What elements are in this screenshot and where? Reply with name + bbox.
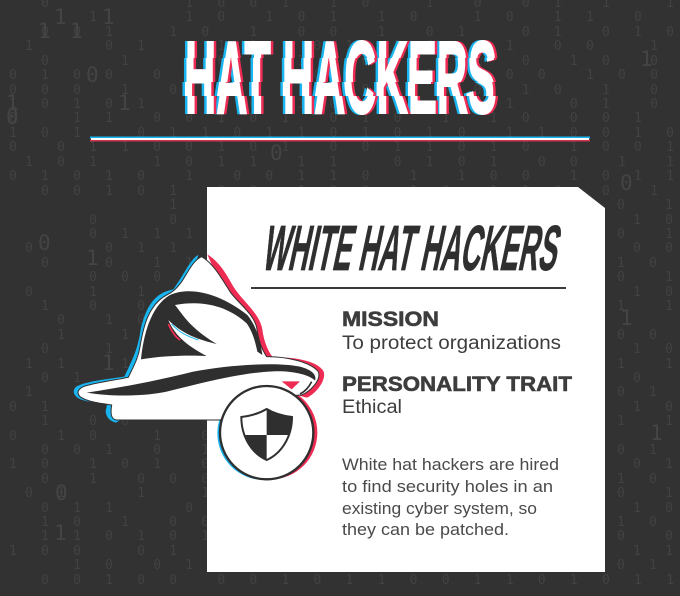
text: 1 0 1 0 1 0 1 — [9, 457, 249, 472]
text: 0 — [620, 171, 633, 195]
personality trait text: PERSONALITY TRAIT — [342, 373, 572, 396]
text: 0 — [55, 481, 68, 505]
text: 1 1 — [617, 414, 680, 429]
text: 1 0 0 1 0 — [9, 299, 217, 314]
text: 1 0 1 0 0 1 — [9, 515, 249, 530]
text: 1 — [650, 421, 663, 445]
text: 1 0 0 1 — [9, 558, 201, 573]
text: 0 1 — [617, 558, 665, 573]
text: 0 1 — [617, 443, 665, 458]
text: 1 0 1 0 1 1 1 0 1 0 0 1 1 0 1 0 1 0 1 — [9, 97, 680, 112]
text: 0 1 1 — [9, 285, 153, 300]
text: 0 0 — [617, 241, 680, 256]
text: 0 1 — [9, 400, 57, 415]
text: 0 — [86, 63, 99, 87]
description text: White hat hackers are hired — [342, 455, 559, 474]
text: 1 0 0 — [9, 414, 137, 429]
text: 0 1 0 — [9, 342, 185, 357]
text: 0 1 0 0 0 0 — [9, 472, 249, 487]
text: 0 1 — [617, 198, 680, 213]
shield badge — [220, 386, 313, 479]
text: 0 1 1 1 1 — [9, 486, 249, 501]
icon: white hat with shield badge — [74, 254, 324, 480]
text: 1 1 — [617, 299, 680, 314]
text: 1 0 — [617, 400, 680, 415]
text: 0 1 — [617, 385, 665, 400]
text: 0 0 — [617, 529, 680, 544]
description text: they can be patched. — [342, 520, 509, 539]
mission text — [342, 308, 561, 354]
text: 0 0 1 1 0 1 0 0 1 0 1 0 1 0 1 0 — [9, 25, 680, 40]
text: 0 0 1 1 1 1 — [9, 241, 330, 256]
text: 0 0 1 1 — [9, 256, 201, 271]
text: 1 — [70, 19, 83, 43]
text: 0 — [617, 371, 649, 386]
text: 1 0 — [617, 472, 665, 487]
text: 0 1 1 0 0 1 0 0 1 1 0 1 0 0 1 — [9, 54, 680, 69]
hat brim band — [87, 364, 315, 396]
text: 1 — [102, 5, 115, 29]
text: 0 0 1 0 1 0 — [9, 443, 249, 458]
text: 0 1 1 0 0 1 — [9, 501, 265, 516]
description text: to find security holes in an — [342, 477, 553, 496]
mission text: MISSION — [342, 308, 439, 331]
text: 0 1 0 1 0 — [9, 313, 217, 328]
text: 1 — [102, 351, 115, 375]
text: 0 1 — [617, 457, 680, 472]
text: 1 — [118, 91, 131, 115]
text: 0 1 0 1 0 — [9, 429, 217, 444]
description text: existing cyber system, so — [342, 499, 537, 518]
text: 1 — [54, 5, 67, 29]
text: 0 1 — [9, 371, 89, 386]
text: 1 1 — [617, 544, 680, 559]
text: 1 1 — [617, 357, 680, 372]
text: 0 1 — [617, 486, 680, 501]
text: 1 — [640, 47, 653, 71]
hat crown band and feather — [141, 291, 262, 359]
text: 1 1 — [9, 328, 137, 343]
text: 0 0 1 0 — [9, 213, 297, 228]
text: 1 1 1 — [9, 357, 137, 372]
text: 1 0 0 0 1 1 — [9, 544, 233, 559]
text: 1 0 — [617, 256, 665, 271]
text: 1 0 — [617, 515, 665, 530]
text: 0 1 0 0 0 0 1 0 0 1 0 1 1 0 0 1 0 0 — [9, 68, 680, 83]
text: 1 — [38, 19, 51, 43]
text: 1 — [54, 521, 67, 545]
text: 0 0 — [617, 328, 665, 343]
text: 1 0 — [617, 342, 680, 357]
text: 1 0 — [617, 213, 680, 228]
text: 1 — [620, 306, 633, 330]
text: 0 1 1 1 0 1 — [9, 227, 314, 242]
text: 1 — [86, 246, 99, 270]
panel: white hat hackers card — [207, 187, 605, 572]
text: 1 0 1 1 0 0 1 1 0 1 0 0 1 1 — [9, 39, 680, 54]
text: 0 1 — [617, 227, 680, 242]
text: 1 1 — [9, 198, 330, 213]
red triangle under brim — [282, 381, 300, 389]
personality trait text — [342, 373, 572, 418]
title: HAT HACKERS — [182, 40, 498, 115]
description text — [342, 455, 559, 539]
title underline — [90, 136, 590, 142]
text: 0 1 — [617, 270, 680, 285]
text: 0 1 1 0 0 1 0 1 0 1 0 1 1 0 0 0 1 — [9, 111, 680, 126]
text: 0 0 0 1 — [9, 270, 233, 285]
personality trait text: Ethical — [342, 397, 402, 418]
mission text: To protect organizations — [342, 333, 561, 354]
text: 1 0 — [9, 385, 105, 400]
text: 0 — [6, 105, 19, 129]
text: 1 0 — [617, 501, 680, 516]
icon: checkered shield — [241, 409, 292, 460]
hat glitch shadows — [74, 254, 324, 480]
text: 1 — [6, 91, 19, 115]
text: 0 — [38, 231, 51, 255]
text: 0 0 0 1 0 0 0 1 1 0 1 0 0 1 0 1 0 — [9, 83, 680, 98]
hat body — [78, 257, 319, 420]
text: 1 1 0 1 0 1 0 — [9, 529, 249, 544]
text: 1 1 0 1 0 1 1 0 1 0 1 1 0 1 — [9, 10, 680, 25]
text: 0 — [270, 141, 283, 165]
text: 1 0 — [617, 285, 680, 300]
